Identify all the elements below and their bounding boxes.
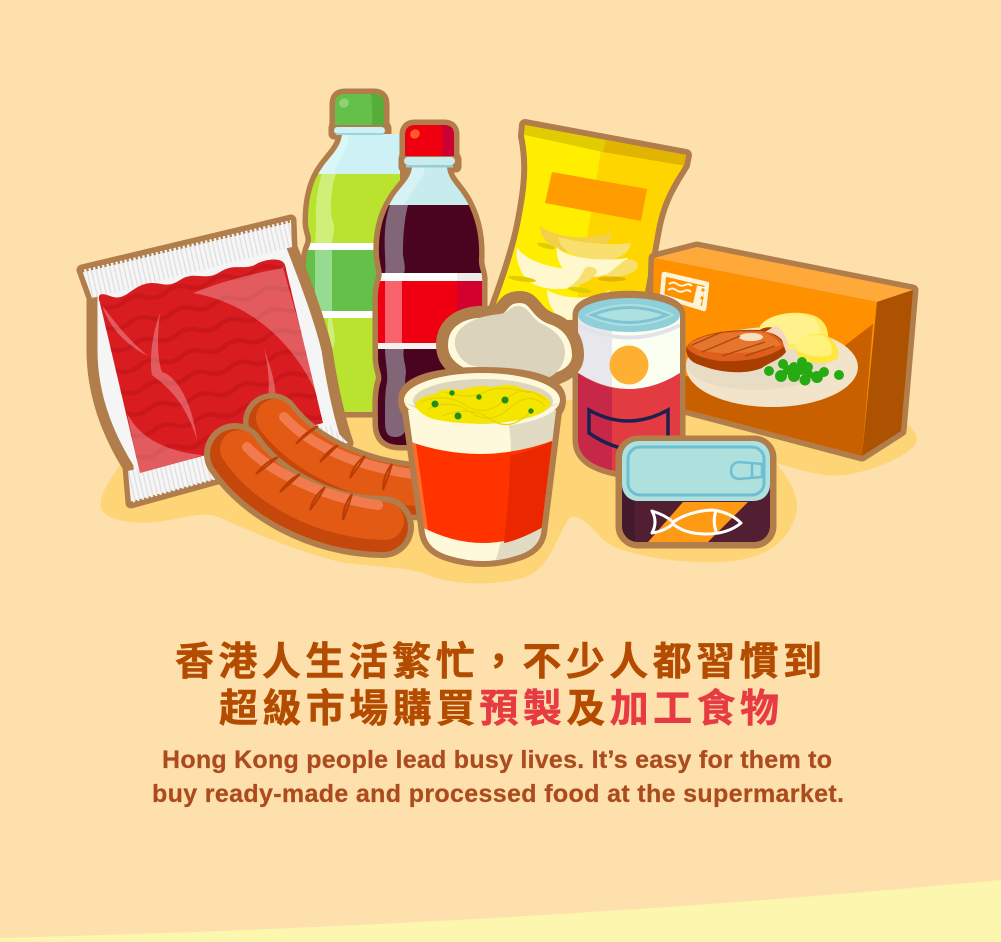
peas: [764, 357, 844, 386]
sausages: [235, 417, 432, 527]
food can: [578, 296, 680, 475]
meat: [99, 259, 323, 473]
fish icon: [652, 510, 741, 534]
tinned fish: [621, 441, 771, 543]
heading: 超級市場購買預製及加工食物: [219, 688, 779, 731]
english subtitle: buy ready-made and processed food at the supermarket.: [152, 780, 844, 808]
instant noodle cup lid: [442, 297, 578, 383]
green soda bottle: [300, 94, 405, 412]
potatoes: [759, 313, 828, 350]
bottom yellow strip: [0, 880, 1001, 942]
plastic wrap highlights: [102, 265, 325, 475]
english subtitle: [152, 746, 844, 808]
minced meat pack: [82, 220, 348, 503]
heading: 香港人生活繁忙，不少人都習慣到: [175, 641, 822, 684]
chips bag: [488, 119, 692, 325]
cola bottle: [370, 125, 490, 449]
english subtitle: Hong Kong people lead busy lives. It’s easy for them to: [162, 746, 832, 774]
steak: [686, 327, 786, 372]
microwave icon: [662, 274, 707, 309]
heading: [175, 641, 822, 731]
frozen meal box: [650, 247, 913, 456]
back sausage: [272, 417, 432, 492]
front sausage: [235, 447, 385, 527]
shadow blob: [101, 400, 917, 584]
food illustration: [82, 94, 917, 584]
instant noodle cup: [400, 373, 570, 575]
plate with steak: [686, 313, 858, 407]
noodles: [415, 385, 551, 425]
